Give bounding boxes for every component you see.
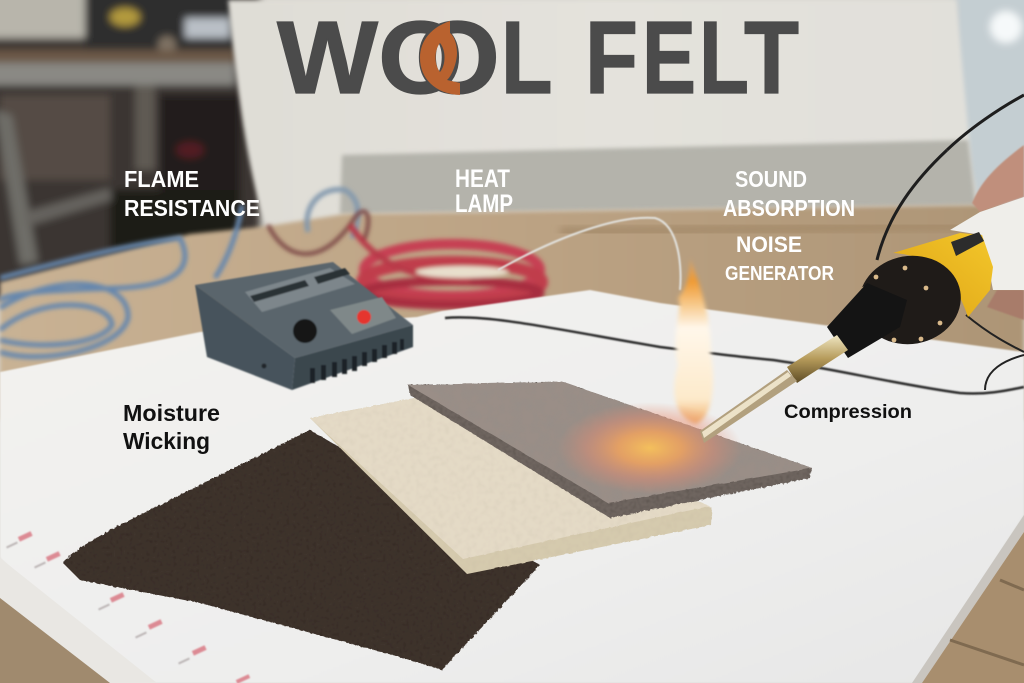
- title: L: [699, 0, 749, 115]
- soldering tool: [700, 95, 1024, 443]
- label: heat lamp: LAMP: [455, 190, 513, 218]
- title interlock accent: [420, 21, 460, 95]
- grey felt sample: [408, 382, 812, 518]
- flame: [674, 258, 713, 424]
- title: O: [378, 0, 463, 115]
- label: compression: Compression: [784, 401, 912, 423]
- title: F: [585, 0, 638, 115]
- title: [277, 0, 799, 115]
- label: sound absorption: SOUND: [735, 166, 807, 192]
- red cable coil: [268, 211, 542, 305]
- label: heat lamp: HEAT: [455, 165, 510, 193]
- cream felt sample: [310, 397, 712, 574]
- ruler markings: [6, 531, 250, 683]
- label: moisture wicking: Moisture: [123, 400, 220, 426]
- white test board: [0, 290, 1024, 683]
- white wire: [498, 218, 681, 290]
- title: W: [277, 0, 379, 115]
- dark felt sample: [63, 430, 540, 670]
- label: flame resistance: RESISTANCE: [124, 195, 260, 221]
- label: noise generator: GENERATOR: [725, 263, 834, 285]
- control box: [195, 262, 413, 390]
- label: sound absorption: ABSORPTION: [723, 195, 855, 221]
- title: O: [415, 0, 500, 115]
- label: moisture wicking: Wicking: [123, 428, 210, 454]
- blue cables: [0, 189, 358, 357]
- title: E: [642, 0, 696, 115]
- title: T: [744, 0, 799, 115]
- title: L: [501, 0, 551, 115]
- label: flame resistance: FLAME: [124, 166, 199, 192]
- label: noise generator: NOISE: [736, 232, 802, 257]
